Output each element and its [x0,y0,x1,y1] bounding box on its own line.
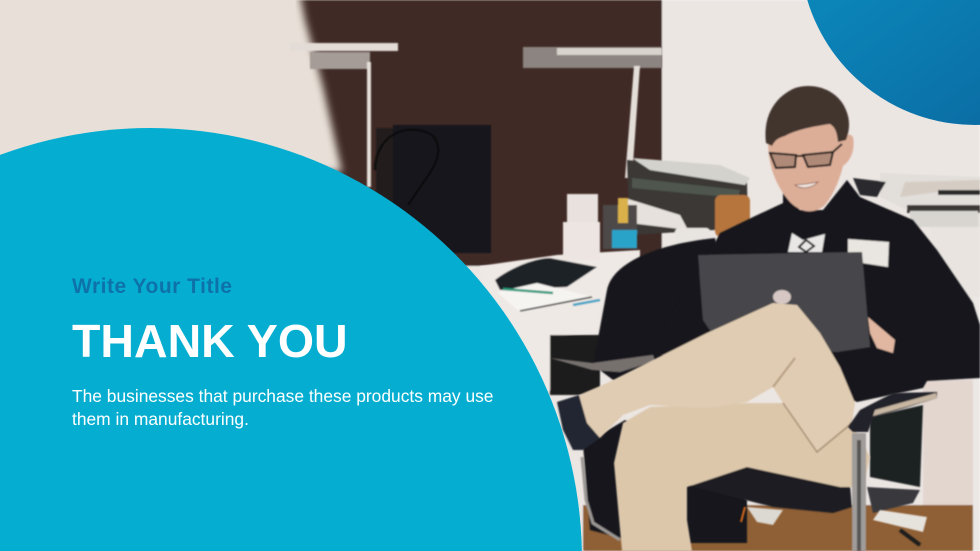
main heading: THANK YOU [72,315,348,367]
cyan circle [0,128,582,551]
description text [72,386,493,429]
office chair and under-desk items [550,238,923,543]
shelf clutter [603,158,750,249]
subtitle: Write Your Title [72,275,232,298]
shirt logo [788,233,825,252]
lower leg [614,403,870,551]
monitor and headset [375,125,491,253]
description text: The businesses that purchase these products may use [72,386,493,406]
hair [765,86,849,146]
apple logo on laptop [773,290,791,304]
desk [480,194,640,395]
glasses [770,144,842,168]
torso and arms [655,180,980,402]
wall lamps [290,43,662,187]
neck and face [768,122,854,211]
smile [795,182,818,188]
seat [687,462,852,513]
chair armrest [848,392,937,551]
photo background: room [296,0,980,551]
crossed leg [579,303,855,452]
name tag [848,239,889,267]
man [557,86,980,551]
description text: them in manufacturing. [72,409,249,429]
navy circle top right [807,0,980,125]
laptop [698,252,870,352]
blurred foreground column [0,0,342,172]
printer [853,173,980,297]
floor accessories [741,507,927,545]
hand [868,317,895,353]
foot [557,395,600,450]
